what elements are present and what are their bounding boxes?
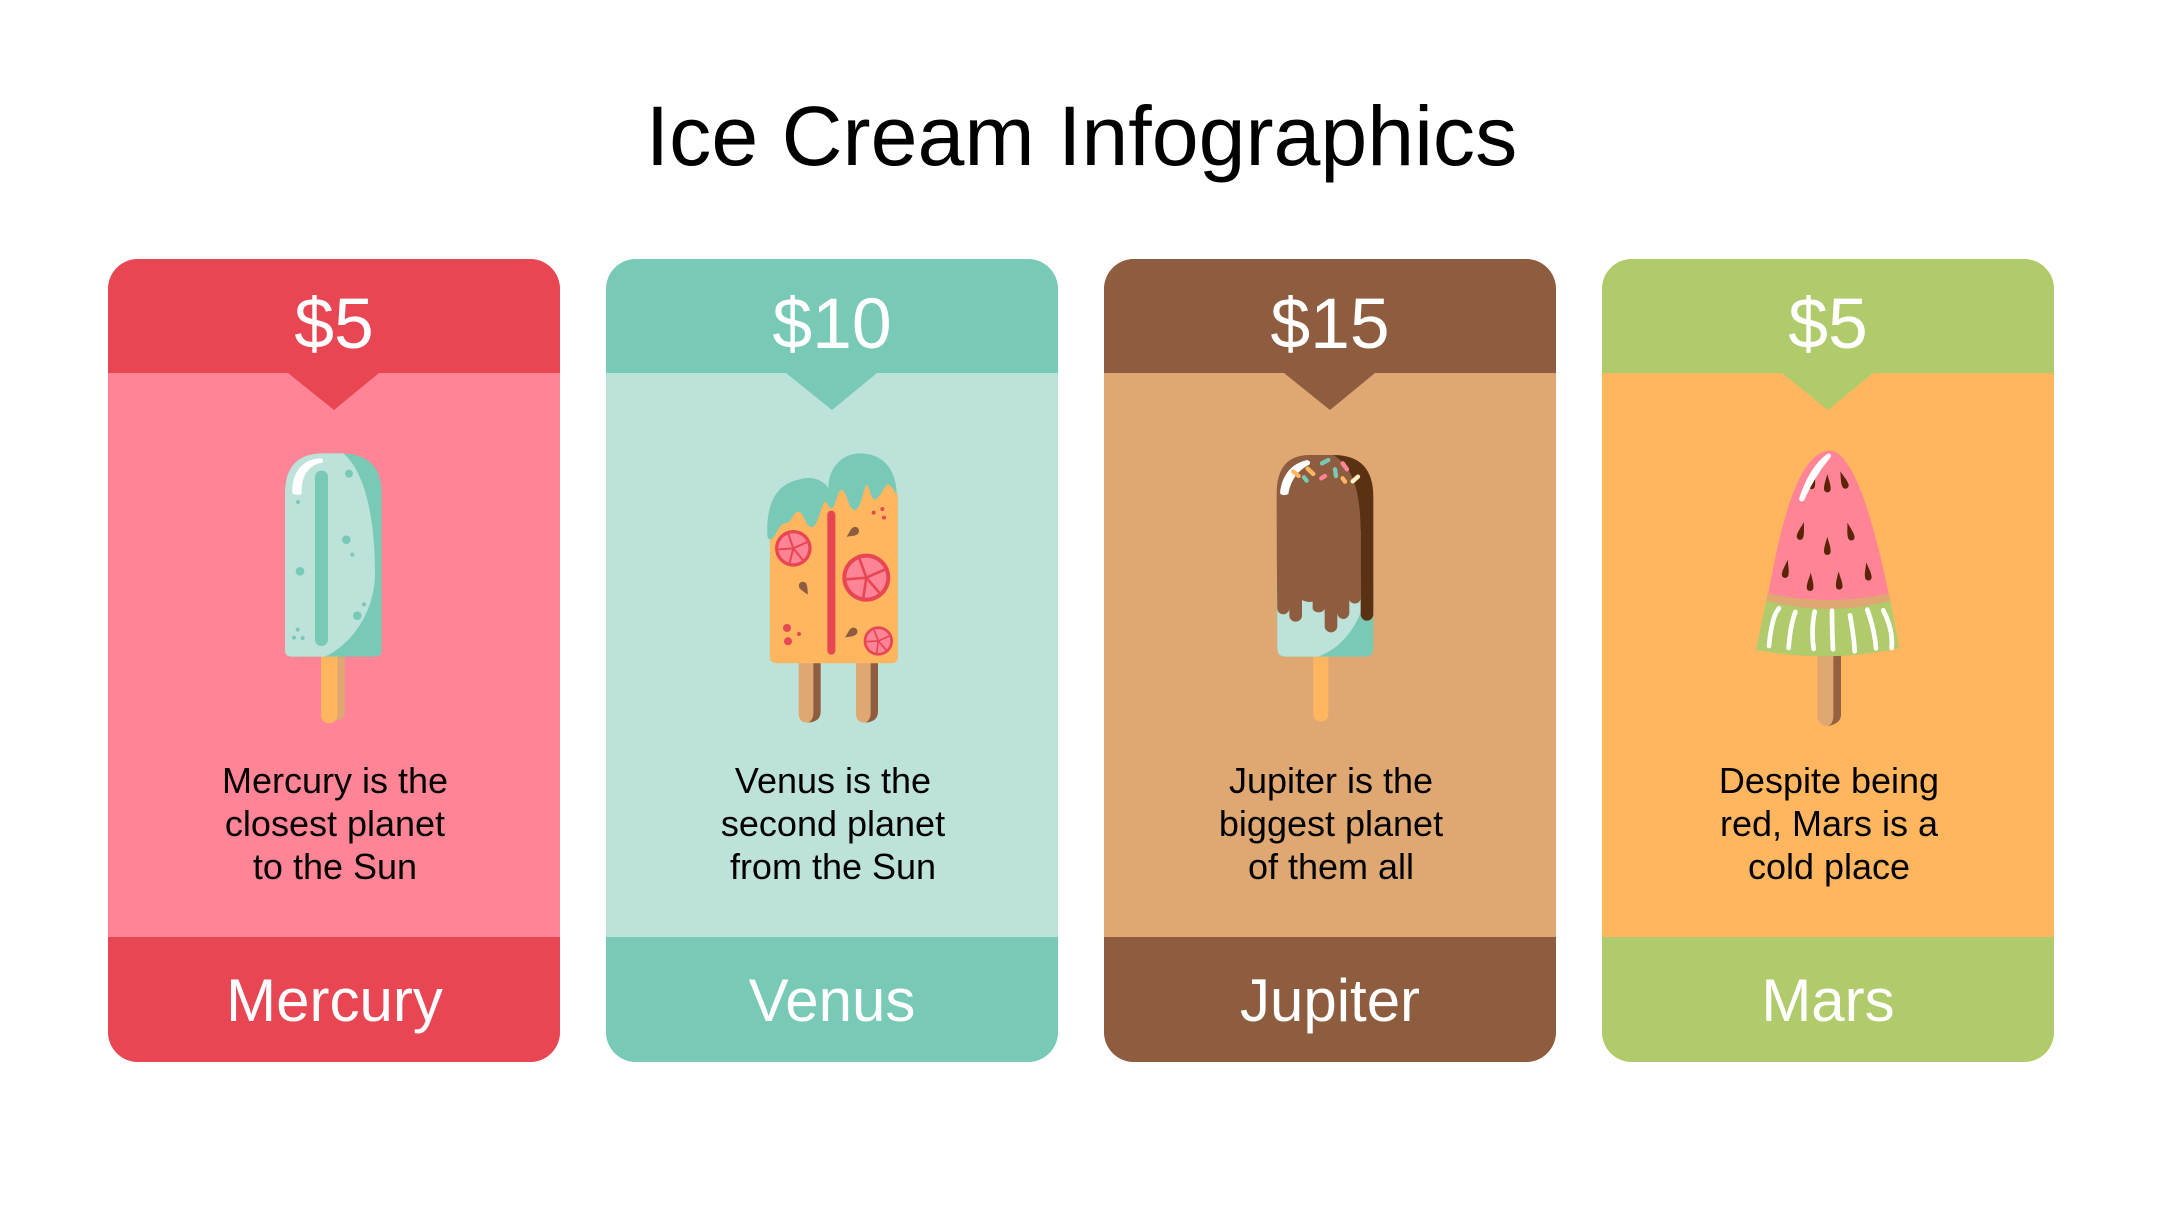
- description: of them all: [1248, 846, 1414, 887]
- footer band: [1104, 937, 1556, 1062]
- card background: [606, 259, 1058, 1062]
- footer band: [108, 937, 560, 1062]
- card background: [108, 259, 560, 1062]
- icon: mint popsicle: [285, 453, 382, 723]
- planet name: Jupiter: [1240, 967, 1420, 1034]
- description: closest planet: [225, 803, 445, 844]
- icon: chocolate popsicle: [1277, 455, 1373, 722]
- seeds: [1781, 470, 1872, 591]
- description: red, Mars is a: [1720, 803, 1939, 844]
- price header: [606, 259, 1058, 410]
- description: Jupiter is the: [1229, 760, 1433, 801]
- panel: Mars: [1602, 259, 2054, 1062]
- footer band: [606, 937, 1058, 1062]
- rind stripes: [1769, 608, 1892, 651]
- panel: Mercury: [108, 259, 560, 1062]
- price: $10: [772, 284, 892, 364]
- price header: [1104, 259, 1556, 410]
- price: $15: [1270, 284, 1390, 364]
- icon: double orange popsicle: [767, 453, 898, 723]
- planet name: Mars: [1761, 967, 1895, 1034]
- price: $5: [294, 284, 374, 364]
- description: Venus is the: [735, 760, 931, 801]
- title: Ice Cream Infographics: [646, 89, 1517, 183]
- price: $5: [1788, 284, 1868, 364]
- description: Despite being: [1719, 760, 1939, 801]
- card background: [1104, 259, 1556, 1062]
- card background: [1602, 259, 2054, 1062]
- description: biggest planet: [1219, 803, 1443, 844]
- description: cold place: [1748, 846, 1910, 887]
- footer band: [1602, 937, 2054, 1062]
- description: from the Sun: [730, 846, 936, 887]
- icon: watermelon popsicle: [1756, 451, 1899, 726]
- price header: [108, 259, 560, 410]
- panel: Venus: [606, 259, 1058, 1062]
- description: to the Sun: [253, 846, 417, 887]
- planet name: Venus: [749, 967, 915, 1034]
- sprinkles: [1293, 460, 1358, 482]
- price header: [1602, 259, 2054, 410]
- citrus slices: [775, 530, 893, 656]
- description: Mercury is the: [222, 760, 448, 801]
- description: second planet: [721, 803, 945, 844]
- panel: Jupiter: [1104, 259, 1556, 1062]
- planet name: Mercury: [226, 967, 443, 1034]
